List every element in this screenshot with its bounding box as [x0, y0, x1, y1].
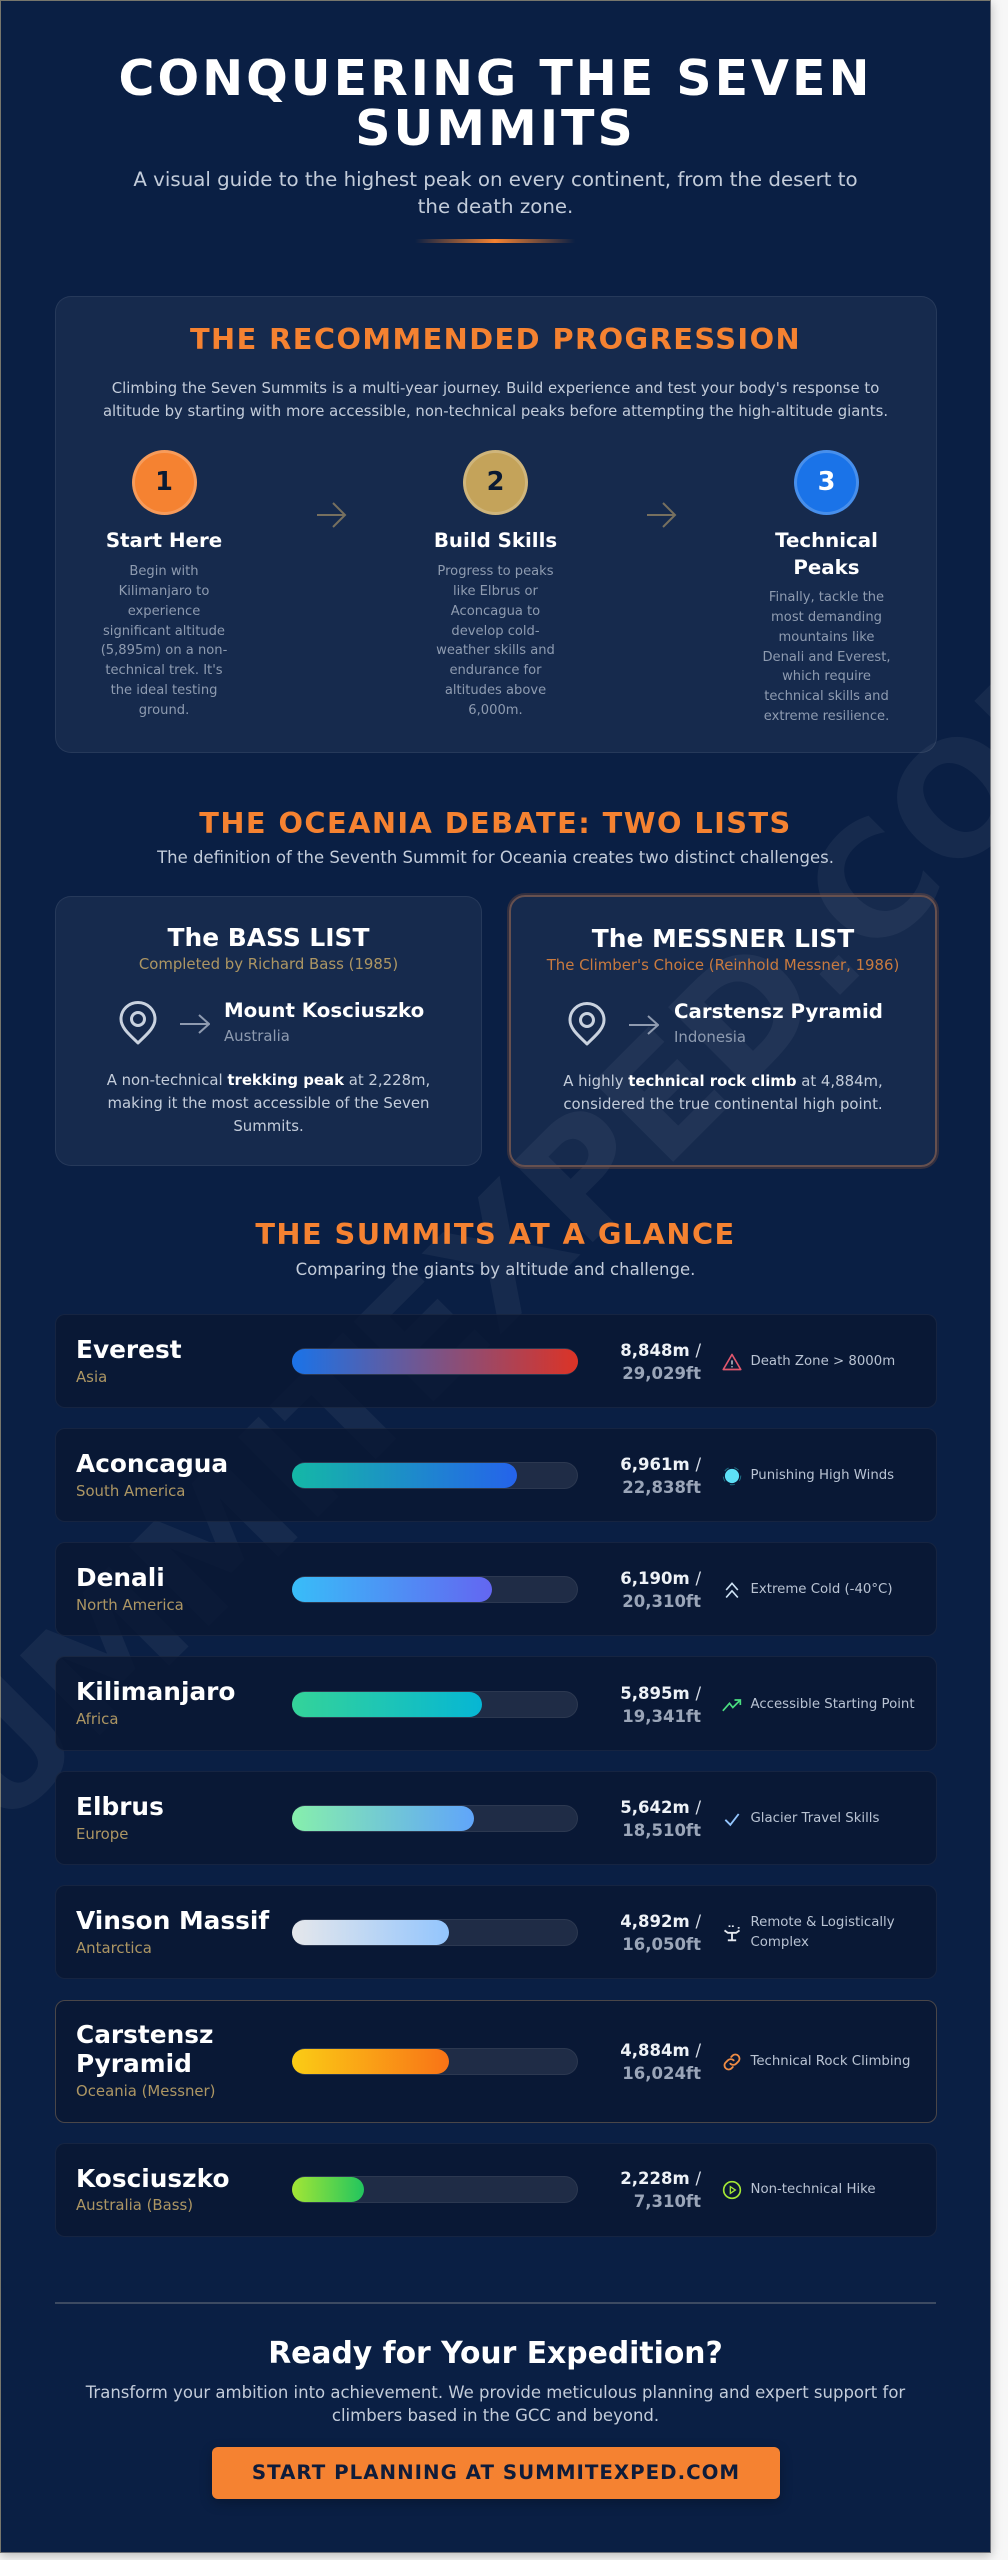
title: CONQUERING THE SEVEN — [119, 50, 872, 107]
step 2 text: like Elbrus or — [453, 584, 538, 599]
altitude — [620, 2169, 701, 2211]
panel: Bass list — [55, 896, 482, 1166]
name: Aconcagua — [76, 1449, 228, 1478]
step 2 text: Aconcagua to — [451, 604, 540, 619]
row: Elbrus — [55, 1771, 937, 1865]
altitude: 7,310ft — [634, 2192, 701, 2211]
name — [76, 2020, 213, 2078]
step 3 text: Finally, tackle the — [769, 590, 884, 605]
heading: summits at a glance: THE SUMMITS AT A GLANCE — [255, 1217, 736, 1251]
continent: Australia (Bass) — [76, 2196, 193, 2214]
step 3 title — [775, 529, 878, 578]
step 1 text: significant altitude — [103, 624, 225, 639]
CTA heading: Ready for Your Expedition? — [268, 2336, 723, 2371]
challenge: Glacier Travel Skills — [750, 1811, 879, 1826]
altitude: 5,895m / — [620, 1684, 701, 1703]
step 1 badge — [132, 450, 196, 515]
icon: wind — [722, 1467, 742, 1486]
step 1 text — [101, 564, 227, 718]
Oceania subtitle: The definition of the Seventh Summit for Oceania creates two distinct challenges. — [157, 848, 834, 867]
step 3 text — [762, 590, 891, 724]
icon: check — [724, 1814, 740, 1826]
step 1 text: Kilimanjaro to — [119, 584, 209, 599]
panel: Messner list — [509, 895, 937, 1167]
step 3 text: extreme resilience. — [764, 709, 889, 724]
step 3 text: most demanding — [771, 610, 882, 625]
step 1 title: Start Here — [106, 529, 222, 552]
subtitle — [133, 168, 858, 218]
altitude: 5,642m / — [620, 1798, 701, 1817]
step 2 text — [436, 564, 555, 718]
icon: link — [724, 2054, 740, 2070]
icon: map pin — [120, 1001, 156, 1045]
name: Carstensz — [76, 2020, 213, 2049]
glance subtitle: Comparing the giants by altitude and challenge. — [296, 1260, 695, 1279]
Messner peak name: Carstensz Pyramid — [674, 1000, 883, 1023]
altitude — [620, 1341, 701, 1383]
arrow: step 1 to 2 — [317, 502, 346, 528]
Messner description: A highly technical rock climb at 4,884m, — [563, 1072, 883, 1090]
row: Everest — [55, 1314, 937, 1408]
step 3 badge: 3 — [818, 467, 835, 497]
step 1 text: Begin with — [129, 564, 199, 579]
CTA text: climbers based in the GCC and beyond. — [332, 2406, 659, 2425]
Messner description — [563, 1072, 883, 1113]
arrow — [629, 1015, 659, 1035]
name: Everest — [76, 1335, 182, 1364]
challenge: Complex — [750, 1935, 809, 1950]
step 2 text: 6,000m. — [468, 703, 523, 718]
arrow — [180, 1014, 210, 1034]
altitude: 29,029ft — [622, 1364, 701, 1383]
altitude — [620, 2041, 701, 2083]
altitude: 19,341ft — [622, 1707, 701, 1726]
step 2 text: endurance for — [449, 663, 542, 678]
CTA button — [212, 2447, 780, 2499]
altitude: 16,050ft — [622, 1935, 701, 1954]
step 2 text: weather skills and — [436, 643, 555, 658]
challenge: Remote & Logistically — [750, 1915, 895, 1930]
title — [119, 50, 872, 157]
subtitle: the death zone. — [418, 195, 573, 218]
Messner peak country: Indonesia — [674, 1028, 746, 1046]
altitude — [620, 1912, 701, 1954]
name: Elbrus — [76, 1792, 164, 1821]
Bass description — [106, 1071, 430, 1135]
title: SUMMITS — [355, 100, 636, 157]
step 3 title: Peaks — [793, 556, 860, 578]
arrow: step 2 to 3 — [647, 502, 676, 528]
step 2 title: Build Skills — [434, 529, 557, 552]
CTA button: START PLANNING AT SUMMITEXPED.COM — [252, 2461, 740, 2484]
icon: antarctic marker — [724, 1925, 740, 1942]
name: Kosciuszko — [76, 2164, 229, 2193]
Bass title: The BASS LIST — [168, 923, 369, 952]
step 1 text: technical trek. It's — [105, 663, 223, 678]
progression intro text: Climbing the Seven Summits is a multi-year journey. Build experience and test your body's response to — [112, 378, 879, 396]
challenge: Non-technical Hike — [750, 2182, 876, 2197]
Bass description: Summits. — [233, 1117, 304, 1135]
Messner description: considered the true continental high point. — [563, 1095, 883, 1113]
step 1 text: experience — [128, 604, 200, 619]
Bass subtitle: Completed by Richard Bass (1985) — [139, 955, 398, 973]
row: Vinson Massif — [55, 1885, 937, 1979]
progression intro text — [103, 378, 888, 420]
row: Carstensz Pyramid — [55, 2000, 937, 2123]
step 3 text: which require — [782, 669, 871, 684]
step 1 badge: 1 — [155, 467, 173, 497]
CTA text — [86, 2382, 906, 2425]
challenge: Technical Rock Climbing — [750, 2054, 910, 2069]
altitude: 4,884m / — [620, 2041, 701, 2060]
challenge: Accessible Starting Point — [750, 1697, 915, 1712]
icon: chevrons — [726, 1582, 738, 1598]
subtitle: A visual guide to the highest peak on every continent, from the desert to — [133, 168, 858, 191]
altitude bar — [292, 2048, 578, 2075]
altitude: 22,838ft — [622, 1478, 701, 1497]
Bass description: A non-technical trekking peak at 2,228m, — [107, 1071, 430, 1089]
CTA text: Transform your ambition into achievement. We provide meticulous planning and expert support for — [86, 2382, 905, 2402]
altitude: 6,190m / — [620, 1569, 701, 1588]
challenge — [750, 1915, 895, 1950]
step 3 badge — [794, 450, 859, 515]
altitude — [620, 1684, 701, 1726]
step 1 text: (5,895m) on a non- — [101, 643, 227, 658]
altitude bar — [292, 2176, 578, 2203]
Bass peak name: Mount Kosciuszko — [224, 999, 424, 1022]
challenge: Death Zone > 8000m — [750, 1354, 895, 1369]
altitude: 6,961m / — [620, 1455, 701, 1474]
challenge: Punishing High Winds — [750, 1468, 894, 1483]
icon: play circle — [722, 2180, 742, 2200]
name: Denali — [76, 1563, 165, 1592]
row: Denali — [55, 1542, 937, 1636]
step 3 text: Denali and Everest, — [762, 650, 891, 665]
altitude: 2,228m / — [620, 2169, 701, 2188]
progression intro text: altitude by starting with more accessible, non-technical peaks before attempting the high-altitude giants. — [103, 402, 888, 420]
continent: South America — [76, 1482, 185, 1500]
icon: warning — [722, 1354, 742, 1370]
step 1 text: the ideal testing — [111, 683, 217, 698]
continent: North America — [76, 1596, 184, 1614]
challenge: Extreme Cold (-40°C) — [750, 1582, 893, 1597]
step 2 text: Progress to peaks — [437, 564, 554, 579]
row: Kilimanjaro — [55, 1656, 937, 1751]
icon: map pin — [568, 1002, 606, 1046]
row: Aconcagua — [55, 1428, 937, 1522]
altitude bar — [292, 1805, 578, 1832]
altitude — [620, 1798, 701, 1840]
altitude — [620, 1455, 701, 1497]
continent: Oceania (Messner) — [76, 2082, 216, 2100]
altitude: 18,510ft — [622, 1821, 701, 1840]
altitude bar — [292, 1462, 578, 1489]
altitude bar — [292, 1691, 578, 1718]
continent: Antarctica — [76, 1939, 152, 1957]
step 2 text: altitudes above — [445, 683, 546, 698]
name: Vinson Massif — [76, 1906, 269, 1935]
step 1 text: ground. — [139, 703, 189, 718]
icon: trending up — [722, 1699, 742, 1712]
row: Kosciuszko — [55, 2143, 937, 2237]
altitude bar — [292, 1576, 578, 1603]
heading: Oceania debate: THE OCEANIA DEBATE: TWO LISTS — [199, 806, 792, 840]
step 3 title: Technical — [775, 529, 878, 552]
altitude bar — [292, 1348, 578, 1375]
altitude: 4,892m / — [620, 1912, 701, 1931]
altitude — [620, 1569, 701, 1611]
Messner subtitle: The Climber's Choice (Reinhold Messner, 1986) — [547, 956, 899, 974]
continent: Europe — [76, 1825, 128, 1843]
altitude bar — [292, 1919, 578, 1946]
step 3 text: technical skills and — [764, 689, 889, 704]
panel: recommended progression — [55, 296, 937, 753]
Bass peak country: Australia — [224, 1027, 290, 1045]
altitude: 16,024ft — [622, 2064, 701, 2083]
altitude: 8,848m / — [620, 1341, 701, 1360]
heading: progression: THE RECOMMENDED PROGRESSION — [190, 322, 801, 356]
altitude: 20,310ft — [622, 1592, 701, 1611]
header divider — [415, 239, 575, 243]
step 2 badge: 2 — [487, 467, 504, 497]
continent: Africa — [76, 1710, 118, 1728]
step 2 text: develop cold- — [451, 624, 540, 639]
continent: Asia — [76, 1368, 107, 1386]
name: Pyramid — [76, 2049, 192, 2078]
step 3 text: mountains like — [779, 630, 874, 645]
Messner title: The MESSNER LIST — [592, 924, 854, 953]
Bass description: making it the most accessible of the Seven — [108, 1094, 429, 1112]
step 2 badge — [463, 450, 528, 515]
name: Kilimanjaro — [76, 1677, 235, 1706]
